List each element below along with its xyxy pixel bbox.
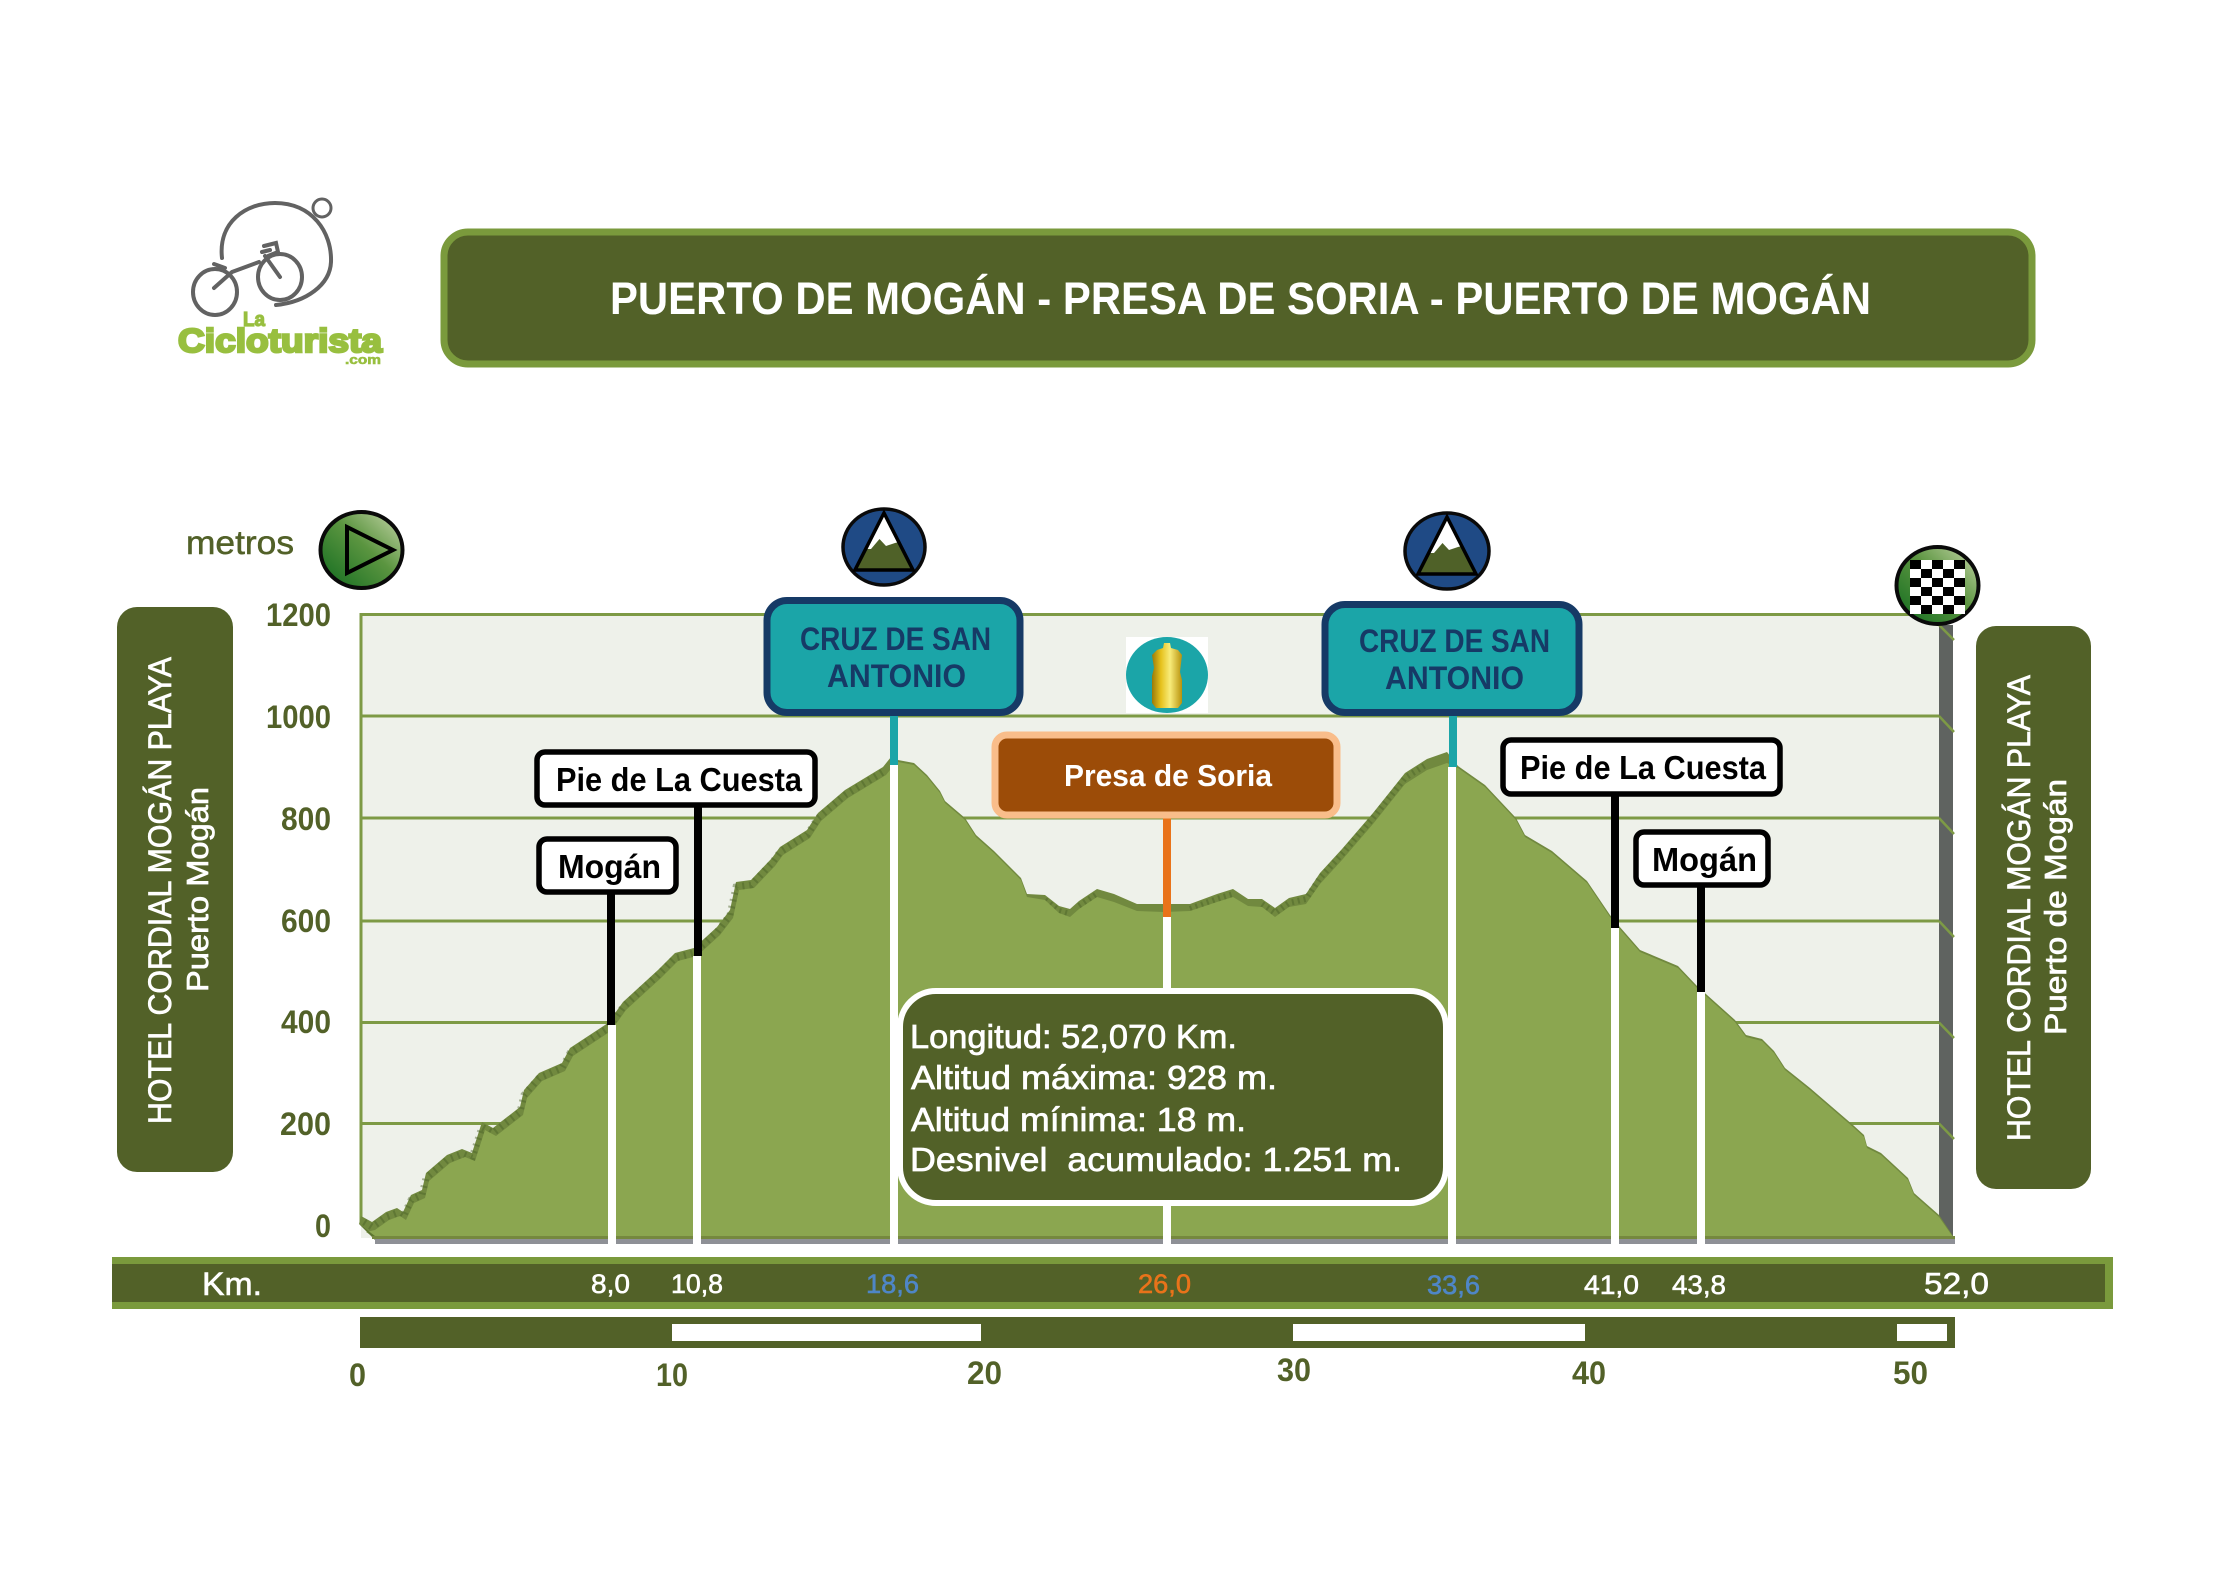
distance scale labels: 30 (1277, 1352, 1311, 1388)
km markers bar: 10,8 (671, 1269, 723, 1299)
label: Cruz de San Antonio right: CRUZ DE SAN (1359, 623, 1550, 659)
elevation profile fill (366, 762, 1953, 1238)
y axis labels: 400 (281, 1004, 331, 1040)
km markers bar: 52,0 (1924, 1266, 1989, 1301)
elevation profile hatching (364, 772, 883, 1227)
logo: La Cicloturista: .com (345, 352, 381, 367)
label: Cruz de San Antonio left: CRUZ DE SAN (800, 621, 991, 657)
panel: finish hotel: HOTEL CORDIAL MOGÁN PLAYA (2001, 674, 2037, 1141)
km markers bar: 43,8 (1672, 1270, 1726, 1300)
y axis labels: 600 (281, 903, 331, 939)
label: Cruz de San Antonio left (767, 600, 1020, 712)
y axis labels: 1200 (266, 597, 331, 633)
distance scale labels (349, 1352, 1928, 1393)
label: Cruz de San Antonio left: ANTONIO (827, 658, 966, 694)
km markers bar: 26,0 (1138, 1269, 1191, 1299)
marker line: Mogán km 8,0 (607, 893, 616, 1244)
panel: finish hotel: Puerto de Mogán (2038, 779, 2073, 1035)
label: Presa de Soria (995, 735, 1337, 815)
icon: mountain left (843, 509, 925, 585)
logo: La Cicloturista: La (243, 309, 266, 331)
km markers bar: 41,0 (1584, 1270, 1639, 1300)
label: Pie de La Cuesta left: Pie de La Cuesta (556, 761, 803, 798)
callout: route statistics: Altitud mínima: 18 m. (911, 1101, 1246, 1138)
y axis labels: 200 (280, 1106, 331, 1142)
label: Mogán right: Mogán (1652, 841, 1757, 878)
label: Cruz de San Antonio right (1325, 604, 1579, 712)
y axis labels: 0 (315, 1208, 331, 1244)
marker line: Presa de Soria km 26,0 (1163, 816, 1171, 1247)
icon: start play button (320, 512, 402, 588)
distance scale labels: 20 (967, 1355, 1002, 1391)
marker line: Pie de La Cuesta km 41,0 (1611, 795, 1619, 1244)
label: Presa de Soria: Presa de Soria (1064, 758, 1273, 793)
elevation profile shadow band (359, 752, 1953, 1238)
km markers bar (112, 1257, 2113, 1309)
label: Cruz de San Antonio right: ANTONIO (1385, 660, 1524, 696)
distance scale labels: 0 (349, 1357, 366, 1393)
km markers bar: Km. (202, 1266, 262, 1302)
title banner (444, 232, 2032, 364)
km markers bar: 8,0 (591, 1269, 630, 1299)
label: Mogán left (539, 839, 676, 892)
marker line: Mogán km 43,8 (1697, 886, 1705, 1244)
title banner: PUERTO DE MOGÁN - PRESA DE SORIA - PUERTO DE MOGÁN (610, 273, 1871, 324)
panel: finish hotel (1976, 626, 2091, 1189)
marker line: Cruz de San Antonio km 18,6 (890, 713, 898, 1245)
marker line: Pie de La Cuesta km 10,8 (693, 806, 702, 1244)
distance scale labels: 10 (656, 1357, 688, 1393)
icon: finish checkered flag (1896, 547, 1978, 624)
icon: water bottle (1126, 637, 1208, 713)
panel: start hotel (117, 607, 233, 1172)
label: Mogán left: Mogán (558, 848, 661, 885)
distance scale labels: 40 (1572, 1355, 1606, 1391)
label: Pie de La Cuesta right (1503, 740, 1780, 794)
callout: route statistics (900, 991, 1446, 1203)
y axis labels (266, 597, 331, 1244)
label: Pie de La Cuesta right: Pie de La Cuesta (1520, 749, 1767, 786)
label: Mogán right (1636, 832, 1768, 885)
logo: La Cicloturista (178, 199, 383, 367)
elevation chart (359, 613, 1955, 1244)
y axis labels: 800 (281, 801, 331, 837)
logo: La Cicloturista: Cicloturista (178, 322, 383, 359)
callout: route statistics: Altitud máxima: 928 m. (911, 1059, 1277, 1096)
label: Pie de La Cuesta left (537, 752, 815, 805)
icon: mountain right (1405, 513, 1489, 589)
marker line: Cruz de San Antonio km 33,6 (1448, 713, 1457, 1257)
distance scale labels: 50 (1893, 1355, 1928, 1391)
km markers bar: 18,6 (866, 1269, 919, 1299)
distance scale bar (360, 1317, 1955, 1348)
panel: start hotel: Puerto Mogán (180, 787, 215, 992)
callout: route statistics: Longitud: 52,070 Km. (910, 1018, 1237, 1055)
km markers bar: 33,6 (1427, 1270, 1480, 1300)
chart base (359, 1224, 1955, 1244)
y axis labels: 1000 (266, 699, 331, 735)
callout: route statistics: Desnivel acumulado: 1.251 m. (910, 1141, 1402, 1178)
panel: start hotel: HOTEL CORDIAL MOGÁN PLAYA (142, 656, 178, 1124)
axis label: metros: metros (186, 524, 294, 561)
